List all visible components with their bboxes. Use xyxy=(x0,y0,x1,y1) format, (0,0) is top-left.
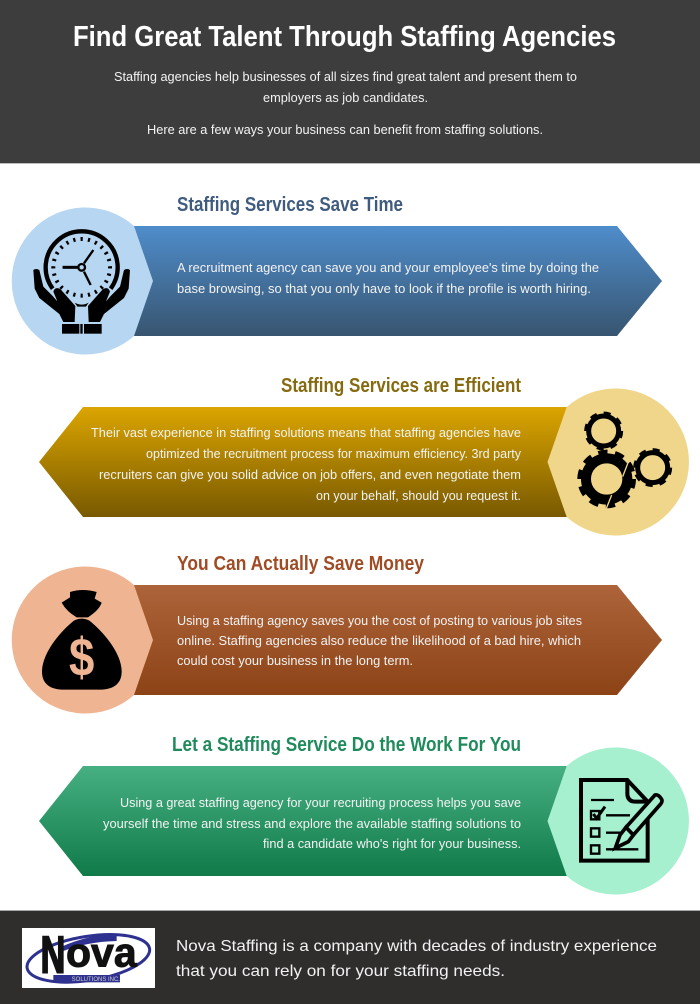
body text: efficient: Their vast experience in staffing solutions means that staffing agencies have xyxy=(91,425,521,440)
icon badge: checklist xyxy=(548,748,689,894)
logo: Nova: SOLUTIONS INC. xyxy=(72,976,120,983)
body text: do the work: Using a great staffing agency for your recruiting process helps you save xyxy=(120,795,521,810)
intro text: employers as job candidates. xyxy=(263,90,428,105)
footer text: Nova Staffing is a company with decades of industry experience xyxy=(176,938,657,955)
footer text xyxy=(176,938,657,980)
panel: save time xyxy=(12,194,662,354)
intro text: Staffing agencies help businesses of all sizes find great talent and present them to xyxy=(114,69,577,84)
icon badge: clock xyxy=(12,208,153,354)
arrow banner: save money xyxy=(120,585,662,695)
arrow banner: efficient xyxy=(39,407,580,517)
icon: checklist and pen xyxy=(581,780,662,861)
intro text xyxy=(114,69,577,137)
heading: save time: Staffing Services Save Time xyxy=(177,194,403,216)
body text: save time: base browsing, so that you only have to look if the profile is worth hiring. xyxy=(177,281,591,296)
title: Find Great Talent Through Staffing Agencies xyxy=(73,21,616,53)
body text: save money xyxy=(177,613,582,668)
icon: money bag: $ xyxy=(69,629,94,688)
body text: do the work xyxy=(103,795,521,851)
logo: Nova xyxy=(22,926,155,990)
body text: efficient: optimized the recruitment process for maximum efficiency. 3rd party xyxy=(146,446,522,461)
logo: Nova: ova xyxy=(66,930,138,976)
icon badge: money bag xyxy=(12,567,153,714)
panel: save money xyxy=(12,553,662,714)
heading: do the work: Let a Staffing Service Do the Work For You xyxy=(172,734,521,756)
panel: do the work xyxy=(39,734,689,894)
body text: do the work: yourself the time and stress and explore the available staffing solutions to xyxy=(103,816,521,831)
body text: save time xyxy=(177,260,599,296)
arrow banner: save time xyxy=(120,226,662,336)
footer text: that you can rely on for your staffing needs. xyxy=(176,963,505,980)
body text: do the work: find a candidate who's right for your business. xyxy=(263,836,521,851)
panel: efficient xyxy=(39,375,689,535)
icon: money bag xyxy=(42,590,122,690)
icon badge: gears xyxy=(548,388,689,535)
body text: efficient: on your behalf, should you request it. xyxy=(316,488,521,503)
heading: efficient: Staffing Services are Efficient xyxy=(281,375,521,397)
logo: Nova: N xyxy=(41,926,65,984)
body text: efficient xyxy=(91,425,522,503)
body text: efficient: recruiters can give you solid advice on job offers, and even negotiate them xyxy=(99,467,521,482)
header banner xyxy=(0,0,700,164)
footer band xyxy=(0,910,700,1004)
body text: save money: Using a staffing agency saves you the cost of posting to various job sites xyxy=(177,613,582,628)
icon: gears xyxy=(581,413,670,509)
heading: save money: You Can Actually Save Money xyxy=(177,553,425,575)
body text: save time: A recruitment agency can save you and your employee's time by doing the xyxy=(177,260,599,275)
intro text: Here are a few ways your business can benefit from staffing solutions. xyxy=(147,122,543,137)
body text: save money: could cost your business in the long term. xyxy=(177,653,413,668)
arrow banner: do the work xyxy=(39,766,580,876)
body text: save money: online. Staffing agencies also reduce the likelihood of a bad hire, which xyxy=(177,633,581,648)
icon: clock in hands xyxy=(33,231,130,334)
